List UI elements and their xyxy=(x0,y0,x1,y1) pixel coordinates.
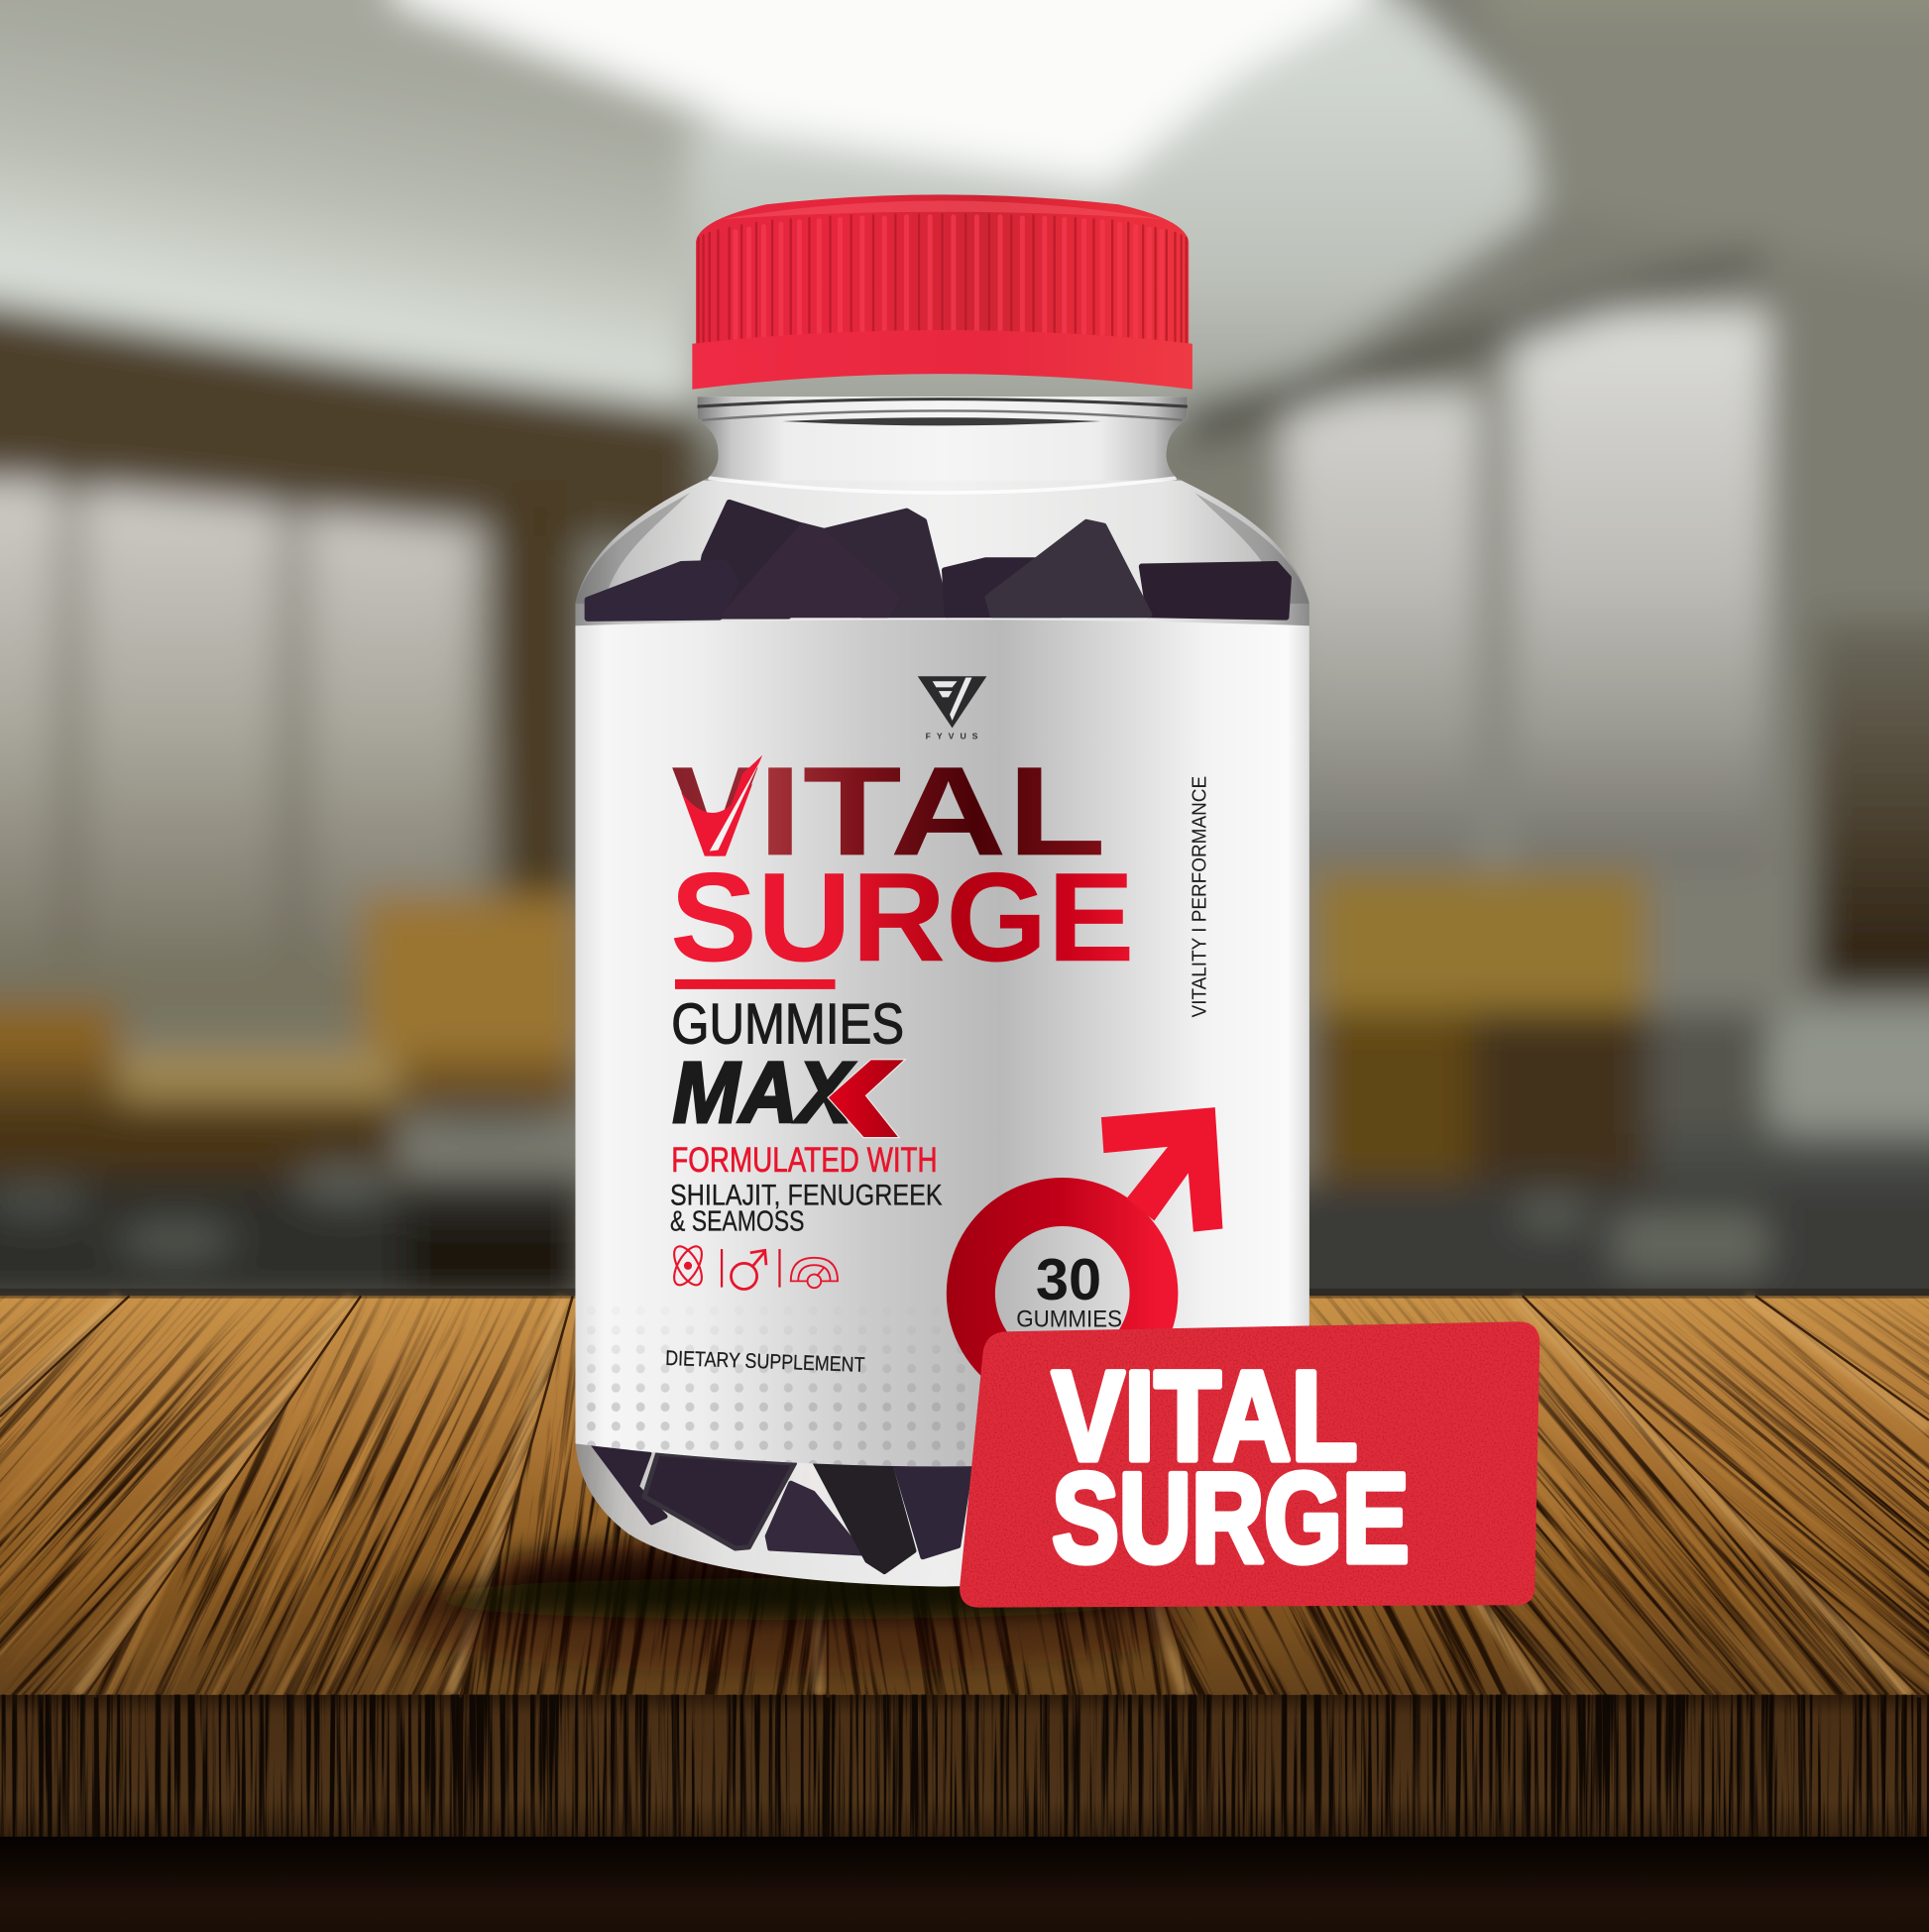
male symbol count badge xyxy=(947,1107,1222,1410)
label xyxy=(575,610,1309,1497)
product name: Surge: SURGE xyxy=(670,847,1134,988)
halftone dots xyxy=(587,1326,965,1466)
top edge shadow xyxy=(0,1289,1929,1299)
red divider bar xyxy=(675,979,836,989)
formulated with: FORMULATED WITH xyxy=(671,1142,938,1180)
icon: male symbol xyxy=(732,1250,766,1289)
product name: Vital xyxy=(671,740,1106,882)
ingredients xyxy=(670,1179,943,1237)
plank seams xyxy=(0,1296,1929,1695)
ingredients: & SEAMOSS xyxy=(670,1205,804,1237)
badge text: SURGE xyxy=(1052,1448,1410,1590)
wooden table top xyxy=(0,1289,1929,1697)
male symbol count badge: GUMMIES xyxy=(1016,1307,1122,1332)
icon: gauge xyxy=(791,1258,838,1288)
red badge xyxy=(955,1318,1546,1614)
cap band xyxy=(692,330,1192,390)
gummies in upper bottle xyxy=(588,503,1289,619)
table underside xyxy=(0,1837,1929,1932)
brand logo: FYVUS xyxy=(926,732,983,741)
far-edge light fade xyxy=(0,1296,1929,1497)
product name: Vital: V xyxy=(671,740,758,882)
vertical tagline: VITALITY I PERFORMANCE xyxy=(1190,776,1211,1017)
cap ribs xyxy=(699,214,1187,344)
bottle shadow on table xyxy=(382,1534,1232,1673)
icon: divider two xyxy=(778,1249,781,1288)
table front edge xyxy=(0,1695,1929,1837)
badge text xyxy=(1052,1346,1410,1590)
product name: Vital: ITAL xyxy=(757,740,1106,882)
bottle xyxy=(567,194,1318,1595)
dietary supplement: DIETARY SUPPLEMENT xyxy=(665,1347,865,1377)
cap xyxy=(692,194,1192,390)
icon: divider one xyxy=(721,1249,723,1288)
gummies heading: GUMMIES xyxy=(671,993,904,1057)
ingredients: SHILAJIT, FENUGREEK xyxy=(670,1179,943,1211)
male symbol count badge: 30 xyxy=(1036,1246,1101,1312)
glass body xyxy=(567,388,1318,1595)
icon: atom xyxy=(669,1242,708,1290)
badge text: VITAL xyxy=(1052,1346,1357,1488)
plank grain xyxy=(0,1296,1929,1697)
plank edge highlights xyxy=(0,1296,1929,1695)
gummies in lower bottle xyxy=(593,1443,970,1572)
max heading: MAX xyxy=(672,1045,855,1141)
brand logo xyxy=(918,676,986,741)
